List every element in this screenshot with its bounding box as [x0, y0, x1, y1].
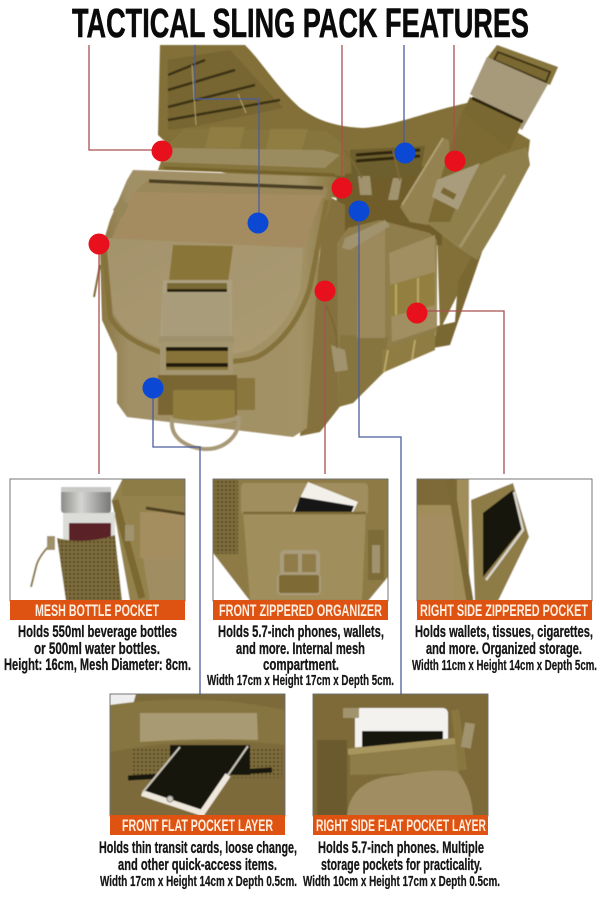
- small buckle: [432, 163, 480, 210]
- pouch lower section: [338, 335, 388, 407]
- description: or 500ml water bottles.: [34, 640, 160, 658]
- front body: [100, 170, 337, 437]
- rear shoulder panel: [158, 45, 530, 330]
- panel: right side flat pocket layer: [303, 694, 500, 890]
- strap buckle top: [463, 45, 558, 150]
- banner: FRONT FLAT POCKET LAYER: [122, 817, 273, 835]
- right strap: [428, 110, 510, 222]
- description: [412, 623, 597, 674]
- banner: [213, 600, 388, 620]
- photo: phone in side flat pocket: [313, 694, 488, 816]
- description: [99, 839, 297, 890]
- photo: phone in front organizer: [213, 479, 388, 601]
- backing behind pouch: [335, 165, 442, 250]
- description: Holds 5.7-inch phones, wallets,: [218, 623, 384, 641]
- description: Holds 550ml beverage bottles: [18, 623, 177, 641]
- panel: mesh bottle pocket: [4, 479, 191, 674]
- callout connector lines: [89, 45, 504, 695]
- pouch webbing: [382, 272, 435, 373]
- velcro panel: [112, 192, 323, 248]
- lower flap: [106, 238, 303, 356]
- panel: right side zippered pocket: [412, 479, 597, 674]
- panel: front zippered organizer: [207, 479, 394, 689]
- photo: bottle in mesh pocket: [30, 479, 185, 600]
- description: compartment.: [263, 656, 339, 674]
- banner: [313, 815, 488, 835]
- lower strap: [158, 375, 255, 422]
- description: Height: 16cm, Mesh Diameter: 8cm.: [4, 656, 191, 674]
- panel: front flat pocket layer: [99, 694, 297, 890]
- description: [303, 839, 500, 890]
- front zipper band: [135, 180, 328, 198]
- description: and more. Internal mesh: [236, 640, 365, 658]
- description: Holds 5.7-inch phones. Multiple: [318, 839, 484, 857]
- small side flap: [400, 138, 450, 225]
- product photo: tactical sling bag: [94, 45, 558, 449]
- photo: phone in open flat pocket: [110, 694, 285, 816]
- right side panel: [427, 147, 530, 260]
- description: Width 10cm x Height 17cm x Depth 0.5cm.: [303, 873, 500, 890]
- main zipper area: [350, 146, 425, 180]
- side pouch: [337, 220, 437, 407]
- description: Holds thin transit cards, loose change,: [99, 839, 297, 857]
- description: Width 17cm x Height 14cm x Depth 0.5cm.: [100, 873, 297, 890]
- rear lower strap: [433, 247, 482, 348]
- flap binding: [103, 200, 327, 362]
- side gusset: [300, 195, 345, 436]
- pouch zip column: [357, 222, 385, 338]
- D ring: [172, 418, 239, 449]
- description: and other quick-access items.: [118, 856, 277, 874]
- top roll lid: [158, 127, 345, 176]
- banner: [10, 600, 185, 620]
- banner: RIGHT SIDE FLAT POCKET LAYER: [316, 817, 486, 835]
- flap webbing: [168, 245, 233, 290]
- shoulder panel webbing: [168, 50, 283, 130]
- description: storage pockets for practicality.: [321, 856, 482, 874]
- description: [4, 623, 191, 674]
- pouch front panel: [389, 235, 437, 342]
- red and blue marker dots: [88, 140, 466, 398]
- description: [207, 623, 394, 689]
- zipper pulls and cords: [94, 150, 402, 372]
- photo: open side pocket: [417, 479, 530, 600]
- banner: [110, 815, 285, 835]
- front buckle: [159, 280, 234, 375]
- description: Width 17cm x Height 17cm x Depth 5cm.: [207, 672, 394, 689]
- banner: FRONT ZIPPERED ORGANIZER: [219, 602, 382, 620]
- banner: MESH BOTTLE POCKET: [35, 602, 159, 620]
